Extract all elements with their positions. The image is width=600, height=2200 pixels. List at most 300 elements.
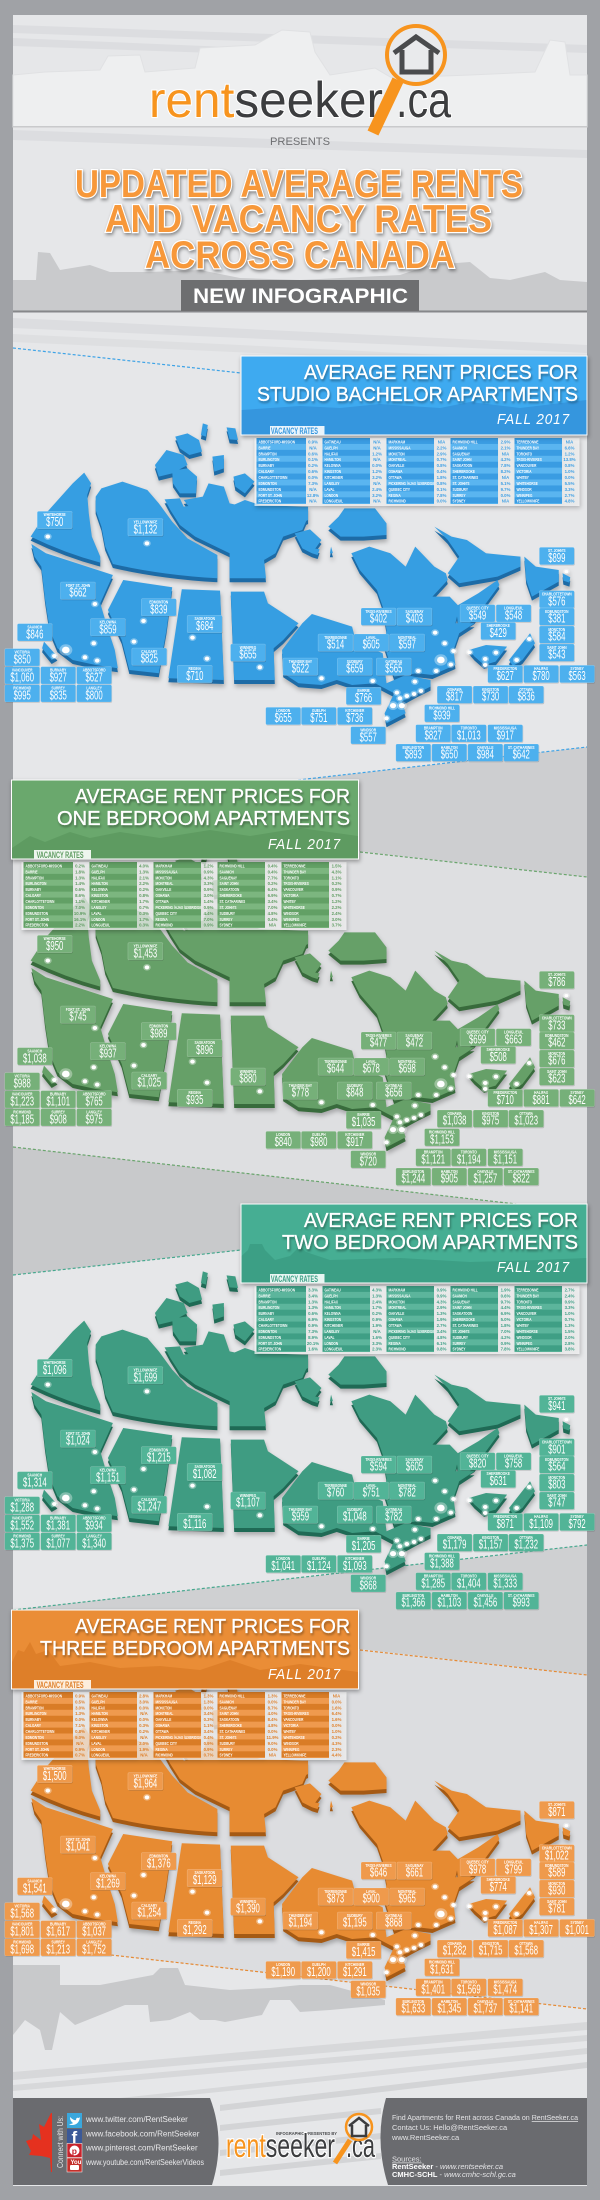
price labels: two bedroom: $631: [490, 1475, 507, 1489]
price labels: three bedroom: LONGUEUIL: [504, 1859, 524, 1865]
price labels: studio: $655: [239, 649, 257, 662]
price labels: studio: $403: [406, 613, 423, 626]
vacancy table: one bedroom: 7.7%: [268, 875, 278, 880]
price labels: two bedroom: RICHMOND: [13, 1533, 31, 1539]
price labels: two bedroom: CALGARY: [141, 1496, 157, 1502]
vacancy table: two bedroom: [254, 1286, 580, 1354]
footer logo: [226, 2114, 375, 2164]
vacancy table: two bedroom: 1.9%: [501, 1287, 511, 1292]
price labels: two bedroom: $1,404: [457, 1578, 481, 1591]
price labels: studio: $846: [26, 629, 44, 642]
vacancy table: one bedroom: 2.2%: [139, 881, 149, 886]
heading panel: one bedroom: AVERAGE RENT PRICES FOR: [75, 786, 350, 808]
price labels: three bedroom: SAINT JOHN: [547, 1898, 567, 1904]
price labels: one bedroom: SAGUENAY: [405, 1032, 424, 1038]
price labels: two bedroom: $1,375: [10, 1538, 34, 1551]
vacancy table: two bedroom: 8.9%: [308, 1335, 318, 1340]
vacancy table: two bedroom: 3.4%: [308, 1293, 318, 1298]
vacancy table: three bedroom: 1.3%: [75, 1711, 85, 1716]
price labels: three bedroom: $1,190: [271, 1966, 295, 1980]
vacancy table: one bedroom: 6.9%: [268, 893, 278, 898]
price labels: studio: HAMILTON: [441, 744, 458, 750]
price labels: one bedroom: ST. JOHN'S: [548, 971, 566, 977]
price labels: studio: GUELPH: [312, 707, 326, 713]
heading panel: studio: VACANCY RATES: [271, 426, 318, 436]
price labels: studio: $766: [355, 692, 372, 706]
vacancy table: two bedroom: 2.0%: [565, 1335, 575, 1340]
vacancy table: two bedroom: 0.9%: [565, 1299, 575, 1304]
price labels: studio: MISSISSAUGA: [494, 725, 517, 731]
vacancy table: one bedroom: 4.8%: [268, 911, 278, 916]
vacancy table: one bedroom: 0.9%: [204, 869, 214, 874]
vacancy table: three bedroom: 0.7%: [204, 1753, 214, 1758]
price labels: one bedroom: HAMILTON: [441, 1168, 458, 1174]
price labels: studio: BRAMPTON: [424, 725, 443, 731]
social links: www.youtube.com/RentSeekerVideos: [85, 2158, 204, 2167]
price labels: three bedroom: $1,087: [493, 1924, 517, 1938]
price labels: two bedroom: LONDON: [276, 1555, 290, 1561]
price labels: studio: WINNIPEG: [240, 644, 256, 650]
vacancy table: three bedroom: 3.0%: [139, 1699, 149, 1704]
price labels: studio: OTTAWA: [519, 686, 533, 692]
logo: rentseeker.ca: [149, 26, 451, 133]
vacancy table: studio: 1.0%: [565, 469, 575, 474]
price labels: one bedroom: $656: [385, 1087, 403, 1100]
vacancy table: studio: 0.0%: [501, 493, 511, 498]
price labels: studio: $780: [532, 670, 550, 684]
price labels: two bedroom: $782: [385, 1511, 403, 1524]
price labels: two bedroom: $993: [513, 1597, 530, 1610]
price labels: studio: $800: [85, 690, 103, 703]
price labels: two bedroom: $959: [292, 1511, 309, 1524]
social links: www.facebook.com/RentSeeker: [85, 2130, 200, 2138]
vacancy table: one bedroom: 0.8%: [139, 893, 149, 898]
price labels: three bedroom: $871: [548, 1806, 566, 1820]
price labels: one bedroom: BURLINGTON: [402, 1168, 424, 1174]
price labels: three bedroom: $873: [327, 1893, 344, 1906]
vacancy table: three bedroom: 0.9%: [204, 1747, 214, 1752]
price labels: two bedroom: $605: [406, 1461, 423, 1474]
heading panel: three bedroom: FALL 2017: [268, 1666, 341, 1683]
vacancy table: one bedroom: 1.4%: [75, 881, 85, 886]
vacancy table: studio: N/A: [566, 439, 573, 444]
price labels: two bedroom: $751: [363, 1487, 380, 1500]
vacancy table: two bedroom: 3.3%: [565, 1305, 575, 1310]
vacancy table: one bedroom: 4.3%: [332, 869, 342, 874]
price labels: studio: REGINA: [188, 665, 201, 671]
price labels: three bedroom: OAKVILLE: [477, 1998, 494, 2004]
price labels: three bedroom: MISSISSAUGA: [494, 1979, 517, 1985]
price labels: one bedroom: ABBOTSFORD: [83, 1091, 106, 1097]
price labels: one bedroom: $477: [370, 1037, 387, 1050]
price labels: three bedroom: $1,345: [437, 2003, 461, 2016]
price labels: one bedroom: $720: [360, 1156, 377, 1169]
price labels: three bedroom: $1,401: [421, 1984, 445, 1997]
social links: [85, 2115, 204, 2167]
price labels: one bedroom: TROIS-RIVIERES: [365, 1032, 392, 1038]
price labels: three bedroom: $646: [370, 1867, 387, 1880]
vacancy table: three bedroom: 1.3%: [204, 1699, 214, 1704]
price labels: two bedroom: WHITEHORSE: [44, 1359, 66, 1365]
vacancy table: two bedroom: 7.8%: [501, 1347, 511, 1352]
vacancy table: studio: N/A: [502, 451, 509, 456]
price labels: studio: $825: [141, 653, 158, 666]
vacancy table: one bedroom: 1.2%: [332, 899, 342, 904]
price labels: two bedroom: $1,082: [193, 1468, 217, 1482]
price labels: two bedroom: $1,340: [82, 1538, 106, 1551]
price labels: two bedroom: $1,333: [493, 1578, 517, 1591]
vacancy table: three bedroom: 0.4%: [204, 1735, 214, 1740]
price labels: three bedroom: RICHMOND HILL: [429, 1959, 455, 1965]
price labels: three bedroom: $1,415: [352, 1946, 376, 1960]
price labels: studio: MONTREAL: [398, 634, 417, 640]
vacancy table: studio: 8.2%: [501, 469, 511, 474]
price labels: studio: SASKATOON: [194, 615, 215, 621]
price labels: studio: RICHMOND: [13, 685, 31, 691]
price labels: three bedroom: THUNDER BAY: [289, 1912, 312, 1918]
price labels: three bedroom: LAVAL: [366, 1888, 377, 1894]
price labels: studio: $429: [490, 627, 507, 641]
vacancy table: three bedroom: 1.3%: [268, 1693, 278, 1698]
vacancy table: three bedroom: 0.3%: [204, 1717, 214, 1722]
price labels: three bedroom: $1,022: [545, 1850, 569, 1863]
bottom grey skyline: [13, 1965, 385, 2050]
price labels: one bedroom: SUDBURY: [347, 1082, 363, 1088]
vacancy table: one bedroom: 1.3%: [139, 869, 149, 874]
vacancy table: studio: 13.8%: [563, 457, 576, 462]
price labels: one bedroom: $642: [568, 1094, 586, 1108]
vacancy table: two bedroom: 0.9%: [437, 1287, 447, 1292]
price labels: three bedroom: $1,291: [343, 1966, 367, 1980]
vacancy table: studio: N/A: [438, 439, 445, 444]
vacancy table: three bedroom: 2.3%: [332, 1747, 342, 1752]
price labels: one bedroom: KINGSTON: [482, 1110, 499, 1116]
price labels: two bedroom: MONTREAL: [398, 1482, 417, 1488]
price labels: one bedroom: $1,185: [10, 1114, 34, 1127]
price labels: three bedroom: WINNIPEG: [240, 1898, 256, 1904]
price labels: three bedroom: $1,569: [457, 1984, 481, 1997]
heading panel: two bedroom: AVERAGE RENT PRICES FOR: [304, 1210, 578, 1232]
vacancy table: one bedroom: 0.9%: [204, 905, 214, 910]
price labels: studio: SUDBURY: [347, 658, 363, 664]
vacancy table: one bedroom: 3.3%: [204, 881, 214, 886]
price labels: studio: BURNABY: [50, 667, 67, 673]
connect with us: Connect with Us:: [55, 2116, 65, 2168]
price labels: three bedroom: ABBOTSFORD: [83, 1921, 106, 1927]
price labels: three bedroom: MONCTON: [548, 1880, 565, 1886]
price labels: one bedroom: $989: [150, 1028, 168, 1041]
vacancy table: studio: 4.2%: [501, 457, 511, 462]
vacancy table: two bedroom: 2.4%: [565, 1293, 575, 1298]
vacancy table: two bedroom: 1.3%: [372, 1293, 382, 1298]
price labels: one bedroom: $908: [50, 1114, 67, 1127]
price labels: two bedroom: CHARLOTTETOWN: [542, 1439, 572, 1445]
vacancy table: studio: 1.2%: [372, 469, 382, 474]
price labels: two bedroom: $747: [548, 1497, 566, 1510]
heading panel: three bedroom: AVERAGE RENT PRICES FOR: [75, 1616, 350, 1638]
price labels: studio: $917: [497, 730, 514, 743]
vacancy table: three bedroom: 0.5%: [75, 1699, 85, 1704]
price labels: two bedroom: ST. CATHARINES: [508, 1592, 535, 1598]
vacancy table: three bedroom: N/A: [140, 1711, 148, 1716]
price labels: one bedroom: CHARLOTTETOWN: [542, 1015, 572, 1021]
price labels: studio: VICTORIA: [14, 649, 30, 655]
price labels: two bedroom: SASKATOON: [194, 1463, 215, 1469]
vacancy table: three bedroom: 0.2%: [332, 1735, 342, 1740]
price labels: one bedroom: MISSISSAUGA: [494, 1149, 517, 1155]
price labels: one bedroom: $472: [406, 1037, 423, 1050]
vacancy table: studio: 4.8%: [565, 499, 575, 504]
vacancy table: studio: 0.2%: [308, 463, 318, 468]
price labels: studio: $1,013: [457, 730, 481, 743]
price labels: two bedroom: TORONTO: [461, 1573, 478, 1579]
price labels: two bedroom: SYDNEY: [570, 1513, 584, 1519]
vacancy table: three bedroom: 0.7%: [75, 1753, 85, 1758]
vacancy table: studio: N/A: [373, 439, 381, 444]
price labels: three bedroom: $965: [399, 1893, 416, 1906]
price labels: one bedroom: $1,244: [401, 1173, 425, 1186]
price labels: one bedroom: $917: [346, 1136, 364, 1150]
price labels: one bedroom: $1,223: [10, 1096, 34, 1109]
price labels: two bedroom: $871: [497, 1518, 514, 1532]
vacancy table: one bedroom: 0.2%: [75, 863, 85, 868]
price labels: two bedroom: $803: [548, 1479, 566, 1492]
vacancy table: studio: 0.1%: [308, 457, 318, 462]
vacancy table: two bedroom: 1.8%: [501, 1323, 511, 1328]
vacancy table: studio: N/A: [373, 481, 381, 486]
vacancy table: one bedroom: 7.0%: [204, 917, 214, 922]
price labels: studio: ST. CATHARINES: [508, 744, 535, 750]
heading panel: two bedroom: TWO BEDROOM APARTMENTS: [282, 1232, 578, 1254]
price labels: two bedroom: LANGLEY: [86, 1533, 102, 1539]
vacancy table: two bedroom: 1.6%: [372, 1335, 382, 1340]
price labels: two bedroom: $1,179: [443, 1539, 467, 1552]
price labels: studio: SURREY: [51, 685, 65, 691]
price labels: studio: $850: [14, 654, 31, 667]
logo: rentseeker.ca: rentseeker: [149, 72, 383, 128]
price labels: studio: $827: [425, 730, 442, 743]
price labels: one bedroom: $937: [99, 1048, 117, 1061]
vacancy table: studio: N/A: [373, 445, 381, 450]
vacancy table: two bedroom: 1.3%: [565, 1323, 575, 1328]
price labels: two bedroom: $1,232: [514, 1539, 538, 1552]
vacancy table: one bedroom: 3.4%: [268, 899, 278, 904]
vacancy table: studio: 2.4%: [372, 487, 382, 492]
price labels: one bedroom: $733: [548, 1020, 566, 1033]
vacancy table: three bedroom: 3.4%: [204, 1729, 214, 1734]
price labels: three bedroom: EDMONTON: [149, 1853, 168, 1859]
price labels: one bedroom: SASKATOON: [194, 1039, 215, 1045]
price labels: one bedroom: TERREBONNE: [324, 1058, 347, 1064]
price labels: three bedroom: BURLINGTON: [402, 1998, 424, 2004]
price labels: studio: RICHMOND HILL: [429, 705, 455, 711]
price labels: two bedroom: EDMONTON: [149, 1447, 168, 1453]
price labels: three bedroom: HALIFAX: [534, 1919, 548, 1925]
heading panel: one bedroom: ONE BEDROOM APARTMENTS: [57, 808, 350, 830]
price labels: two bedroom: LAVAL: [366, 1482, 377, 1488]
price labels: two bedroom: $820: [469, 1458, 486, 1471]
price labels: two bedroom: EDMUNDSTON: [545, 1456, 568, 1462]
price labels: two bedroom: $1,388: [430, 1558, 454, 1571]
vacancy table: studio: 12.8%: [307, 493, 319, 498]
vacancy table: one bedroom: 0.9%: [332, 887, 342, 892]
price labels: one bedroom: $1,151: [493, 1154, 517, 1167]
price labels: two bedroom: $1,699: [134, 1372, 157, 1385]
price labels: three bedroom: $1,541: [23, 1883, 47, 1896]
heading panel: studio: STUDIO BACHELOR APARTMENTS: [257, 384, 578, 406]
price labels: studio: LONDON: [276, 707, 290, 713]
vacancy table: studio: N/A: [309, 499, 317, 504]
price labels: three bedroom: [5, 1765, 595, 2016]
price labels: one bedroom: $1,194: [457, 1154, 481, 1167]
price labels: one bedroom: $1,257: [473, 1173, 497, 1186]
price labels: studio: $627: [85, 672, 103, 685]
price labels: studio: FREDERICTON: [493, 665, 517, 671]
vacancy table: one bedroom: 10.9%: [74, 911, 86, 916]
price labels: studio: SAINT JOHN: [547, 644, 567, 650]
price labels: one bedroom: EDMUNDSTON: [545, 1032, 568, 1038]
price labels: two bedroom: $1,109: [529, 1518, 553, 1532]
vacancy table: three bedroom: 0.0%: [139, 1717, 149, 1722]
price labels: three bedroom: WHITEHORSE: [44, 1765, 66, 1771]
price labels: studio: SHERBROOKE: [487, 622, 510, 628]
price labels: one bedroom: KELOWNA: [100, 1043, 116, 1049]
price labels: studio: $548: [505, 610, 522, 623]
price labels: studio: $995: [14, 690, 31, 703]
price labels: two bedroom: MISSISSAUGA: [494, 1573, 517, 1579]
price labels: two bedroom: $564: [548, 1461, 566, 1474]
vacancy table: three bedroom: 0.3%: [139, 1723, 149, 1728]
price labels: studio: BURLINGTON: [402, 744, 424, 750]
price labels: two bedroom: BRAMPTON: [424, 1573, 443, 1579]
price labels: one bedroom: $678: [363, 1063, 380, 1076]
price labels: studio: WINDSOR: [360, 727, 376, 733]
price labels: three bedroom: $1,698: [10, 1944, 34, 1957]
vacancy table: one bedroom: 6.4%: [268, 887, 278, 892]
price labels: three bedroom: FREDERICTON: [493, 1919, 517, 1925]
price labels: one bedroom: $765: [85, 1096, 103, 1109]
section: three bedroom: [5, 1610, 595, 2016]
vacancy table: three bedroom: 1.6%: [332, 1705, 342, 1710]
price labels: three bedroom: $774: [490, 1881, 507, 1895]
price labels: studio: $514: [327, 639, 344, 652]
price labels: two bedroom: SURREY: [51, 1533, 65, 1539]
vacancy table: two bedroom: 2.8%: [565, 1341, 575, 1346]
vacancy table: two bedroom: 20.1%: [307, 1341, 319, 1346]
presents: PRESENTS: [270, 136, 330, 148]
price labels: two bedroom: $594: [370, 1461, 387, 1474]
price labels: studio: $736: [346, 712, 364, 726]
vacancy table: two bedroom: 3.3%: [372, 1341, 382, 1346]
vacancy table: one bedroom: 0.9%: [204, 923, 214, 928]
vacancy table: studio: 0.0%: [565, 475, 575, 480]
vacancy table: two bedroom: 1.7%: [372, 1305, 382, 1310]
map: one bedroom: [31, 847, 570, 1151]
icon: maple leaf half: [26, 2113, 52, 2172]
price labels: three bedroom: $1,715: [479, 1945, 503, 1958]
vacancy table: studio: 0.8%: [565, 463, 575, 468]
price labels: two bedroom: $1,285: [421, 1578, 445, 1591]
vacancy table: three bedroom: N/A: [333, 1693, 340, 1698]
price labels: three bedroom: BRAMPTON: [424, 1979, 443, 1985]
price labels: one bedroom: THUNDER BAY: [289, 1082, 312, 1088]
price labels: two bedroom: LONGUEUIL: [504, 1453, 524, 1459]
vacancy table: studio: 1.2%: [565, 451, 575, 456]
vacancy table: three bedroom: 0.0%: [204, 1705, 214, 1710]
price labels: three bedroom: SUDBURY: [347, 1912, 363, 1918]
footer panel: contact and sources: RentSeeker - www.rentseeker.ca: [392, 2162, 503, 2171]
vacancy table: two bedroom: N/A: [373, 1329, 381, 1334]
vacancy table: one bedroom: 1.7%: [139, 917, 149, 922]
price labels: studio: CHARLOTTETOWN: [542, 591, 572, 597]
price labels: studio: $817: [446, 691, 463, 704]
vacancy table: two bedroom: 1.5%: [565, 1329, 575, 1334]
vacancy table: two bedroom: 4.2%: [501, 1335, 511, 1340]
header bottom line: [13, 310, 587, 312]
vacancy table: studio: 0.0%: [308, 475, 318, 480]
price labels: one bedroom: $1,035: [352, 1116, 376, 1130]
price labels: two bedroom: $901: [548, 1444, 566, 1457]
price labels: one bedroom: $1,153: [430, 1134, 454, 1147]
vacancy table: two bedroom: 1.3%: [437, 1311, 447, 1316]
vacancy table: three bedroom: 4.3%: [332, 1741, 342, 1746]
vacancy table: studio: 3.3%: [565, 487, 575, 492]
vacancy table: studio: N/A: [309, 445, 317, 450]
vacancy table: one bedroom: 1.8%: [75, 869, 85, 874]
vacancy table: studio: 0.6%: [308, 451, 318, 456]
vacancy table: three bedroom: 3.4%: [204, 1711, 214, 1716]
price labels: one bedroom: $745: [69, 1011, 87, 1024]
price labels: two bedroom: VICTORIA: [14, 1497, 30, 1503]
price labels: two bedroom: TERREBONNE: [324, 1482, 347, 1488]
icon: facebook: f: [72, 2128, 78, 2147]
price labels: three bedroom: GUELPH: [312, 1961, 326, 1967]
price labels: three bedroom: $930: [548, 1885, 566, 1898]
footer panel: contact and sources: Find Apartments for Rent across Canada on RentSeeker.ca: [392, 2113, 579, 2122]
vacancy table: three bedroom: N/A: [140, 1735, 148, 1740]
vacancy table: two bedroom: 6.9%: [501, 1311, 511, 1316]
vacancy table: studio: 5.1%: [501, 481, 511, 486]
price labels: two bedroom: $792: [568, 1518, 586, 1532]
vacancy table: three bedroom: 9.0%: [75, 1735, 85, 1740]
main title: ACROSS CANADA: [145, 234, 455, 277]
price labels: one bedroom: RICHMOND HILL: [429, 1129, 455, 1135]
vacancy table: two bedroom: 1.6%: [308, 1347, 318, 1352]
vacancy table: three bedroom: 8.4%: [268, 1717, 278, 1722]
price labels: studio: $642: [513, 749, 530, 762]
price labels: studio: $927: [50, 672, 67, 685]
vacancy table: studio: 5.5%: [565, 481, 575, 486]
price labels: three bedroom: $1,141: [509, 2003, 533, 2016]
price labels: three bedroom: $661: [406, 1867, 423, 1880]
price labels: two bedroom: FORT ST. JOHN: [66, 1430, 90, 1436]
vacancy table: three bedroom: 0.0%: [139, 1705, 149, 1710]
footer panel: contact and sources: CMHC-SCHL - www.cmhc-schl.gc.ca: [392, 2170, 516, 2179]
price labels: two bedroom: $1,288: [10, 1502, 34, 1515]
vacancy table: one bedroom: N/A: [269, 923, 276, 928]
vacancy table: one bedroom: 0.9%: [204, 887, 214, 892]
price labels: three bedroom: $1,801: [10, 1926, 34, 1939]
new infographic band: [181, 280, 419, 311]
price labels: one bedroom: RICHMOND: [13, 1109, 31, 1115]
section: two bedroom: [5, 1204, 595, 1610]
price labels: one bedroom: $508: [490, 1051, 507, 1065]
vacancy table: three bedroom: 3.0%: [75, 1705, 85, 1710]
vacancy table: studio: 0.7%: [437, 457, 447, 462]
price labels: three bedroom: RICHMOND: [13, 1939, 31, 1945]
price labels: one bedroom: WINNIPEG: [240, 1068, 256, 1074]
price labels: two bedroom: GUELPH: [312, 1555, 326, 1561]
